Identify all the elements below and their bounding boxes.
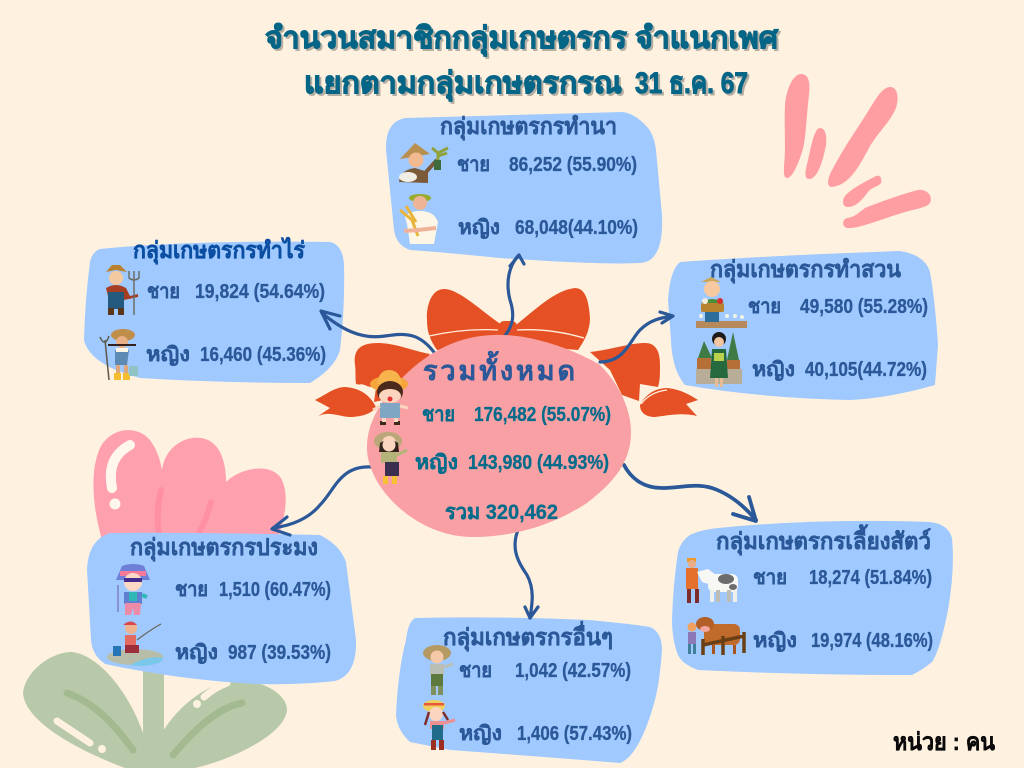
text: other female: 1,406 (57.43%) — [517, 723, 632, 745]
text: fishing female — [175, 642, 331, 664]
text: orchard male — [748, 296, 928, 318]
heading: total: รวมทั้งหมด — [423, 350, 575, 386]
panel: other farmers — [396, 617, 662, 763]
icon: other boy — [423, 645, 453, 695]
text: grand total: รวม 320,462 — [445, 501, 558, 524]
heading: crop farmers: กลุ่มเกษตรกรทำไร่ — [133, 236, 306, 265]
heading: other farmers: กลุ่มเกษตรกรอื่นๆ — [443, 620, 613, 652]
text: total female: หญิง — [415, 452, 458, 474]
text: fishing male: 1,510 (60.47%) — [219, 579, 331, 601]
icon: fisher woman — [107, 622, 163, 666]
panel: orchard farmers — [668, 251, 938, 400]
icon: boy farmer — [370, 370, 408, 425]
text: livestock male: 18,274 (51.84%) — [809, 567, 932, 589]
title: แยกตามกลุ่มเกษตรกรณ — [304, 67, 622, 102]
text: rice male: 86,252 (55.90%) — [509, 154, 637, 176]
panel: crop farmers — [84, 236, 344, 383]
icon: orchard farmer woman — [696, 332, 742, 387]
text: orchard male: 49,580 (55.28%) — [800, 296, 928, 318]
text: fishing female: หญิง — [175, 642, 218, 664]
panel: total — [367, 335, 631, 537]
text: fishing female: 987 (39.53%) — [228, 642, 331, 664]
text: livestock female — [753, 630, 933, 652]
title — [265, 22, 779, 102]
unit note: หน่วย : คน — [893, 729, 996, 756]
text: crop male: 19,824 (54.64%) — [195, 281, 325, 303]
heading: livestock farmers: กลุ่มเกษตรกรเลี้ยงสัตว์ — [716, 524, 931, 556]
arrow: to orchard group — [600, 312, 673, 362]
heading: fishing farmers: กลุ่มเกษตรกรประมง — [130, 534, 318, 562]
text: rice female: 68,048(44.10%) — [515, 217, 638, 239]
text: livestock male: ชาย — [753, 567, 787, 589]
panel: fishing farmers — [87, 533, 356, 684]
text: crop male: ชาย — [147, 281, 180, 303]
text: orchard female: 40,105(44.72%) — [805, 359, 927, 381]
text: crop male — [147, 281, 325, 303]
icon: farmer with cow — [686, 558, 738, 603]
arrow: to livestock group — [624, 465, 756, 521]
arrow: to crop group — [321, 311, 436, 355]
icon: fisher boy — [116, 564, 150, 615]
text: livestock female: หญิง — [753, 630, 797, 652]
text: orchard male: ชาย — [748, 296, 781, 318]
text: fishing male — [175, 579, 331, 601]
icon: rice farmer man — [399, 143, 448, 183]
icon: crop farmer woman — [100, 329, 138, 380]
text: other female — [459, 723, 632, 745]
icon: farmer with brown cow — [688, 617, 744, 655]
text: other male: 1,042 (42.57%) — [515, 660, 631, 682]
heading: orchard farmers: กลุ่มเกษตรกรทำสวน — [710, 256, 901, 284]
icon: orchard farmer man — [696, 277, 747, 328]
title: 31 ธ.ค. 67 — [635, 67, 748, 100]
text: total male — [422, 404, 611, 426]
text: fishing male: ชาย — [175, 579, 208, 601]
decoration: flower — [23, 430, 287, 768]
text: rice male — [457, 154, 637, 176]
icon: crop farmer man — [106, 265, 139, 315]
text: other female: หญิง — [459, 723, 502, 745]
text: crop female: 16,460 (45.36%) — [200, 344, 326, 366]
text: total female — [415, 452, 609, 474]
text: livestock female: 19,974 (48.16%) — [811, 630, 933, 652]
arrow: to other group — [515, 530, 538, 618]
decoration: pink rays — [784, 74, 931, 228]
text: crop female — [146, 344, 326, 366]
arrow: to fishing group — [272, 467, 372, 535]
text: orchard female — [752, 359, 927, 381]
text: other male — [459, 660, 631, 682]
text: orchard female: หญิง — [752, 359, 795, 381]
text: other male: ชาย — [459, 660, 492, 682]
text: livestock male — [753, 567, 932, 589]
arrow: to rice group — [503, 255, 524, 338]
icon: girl farmer — [374, 432, 407, 484]
heading: rice farmers: กลุ่มเกษตรกรทำนา — [440, 113, 617, 141]
text: total female: 143,980 (44.93%) — [468, 452, 609, 474]
title: จำนวนสมาชิกกลุ่มเกษตรกร — [265, 22, 627, 57]
text: crop female: หญิง — [146, 344, 190, 366]
text: total male: 176,482 (55.07%) — [474, 404, 611, 426]
text: total male: ชาย — [422, 404, 455, 426]
panel: rice farmers — [386, 112, 662, 263]
panel: livestock farmers — [672, 521, 953, 675]
decoration: ribbon bow — [315, 288, 698, 417]
text: rice female — [458, 217, 638, 239]
icon: rice farmer woman — [400, 194, 438, 244]
text: rice male: ชาย — [457, 154, 490, 176]
text: rice female: หญิง — [458, 217, 500, 239]
title: จำแนกเพศ — [635, 22, 779, 55]
icon: other girl — [423, 700, 455, 750]
